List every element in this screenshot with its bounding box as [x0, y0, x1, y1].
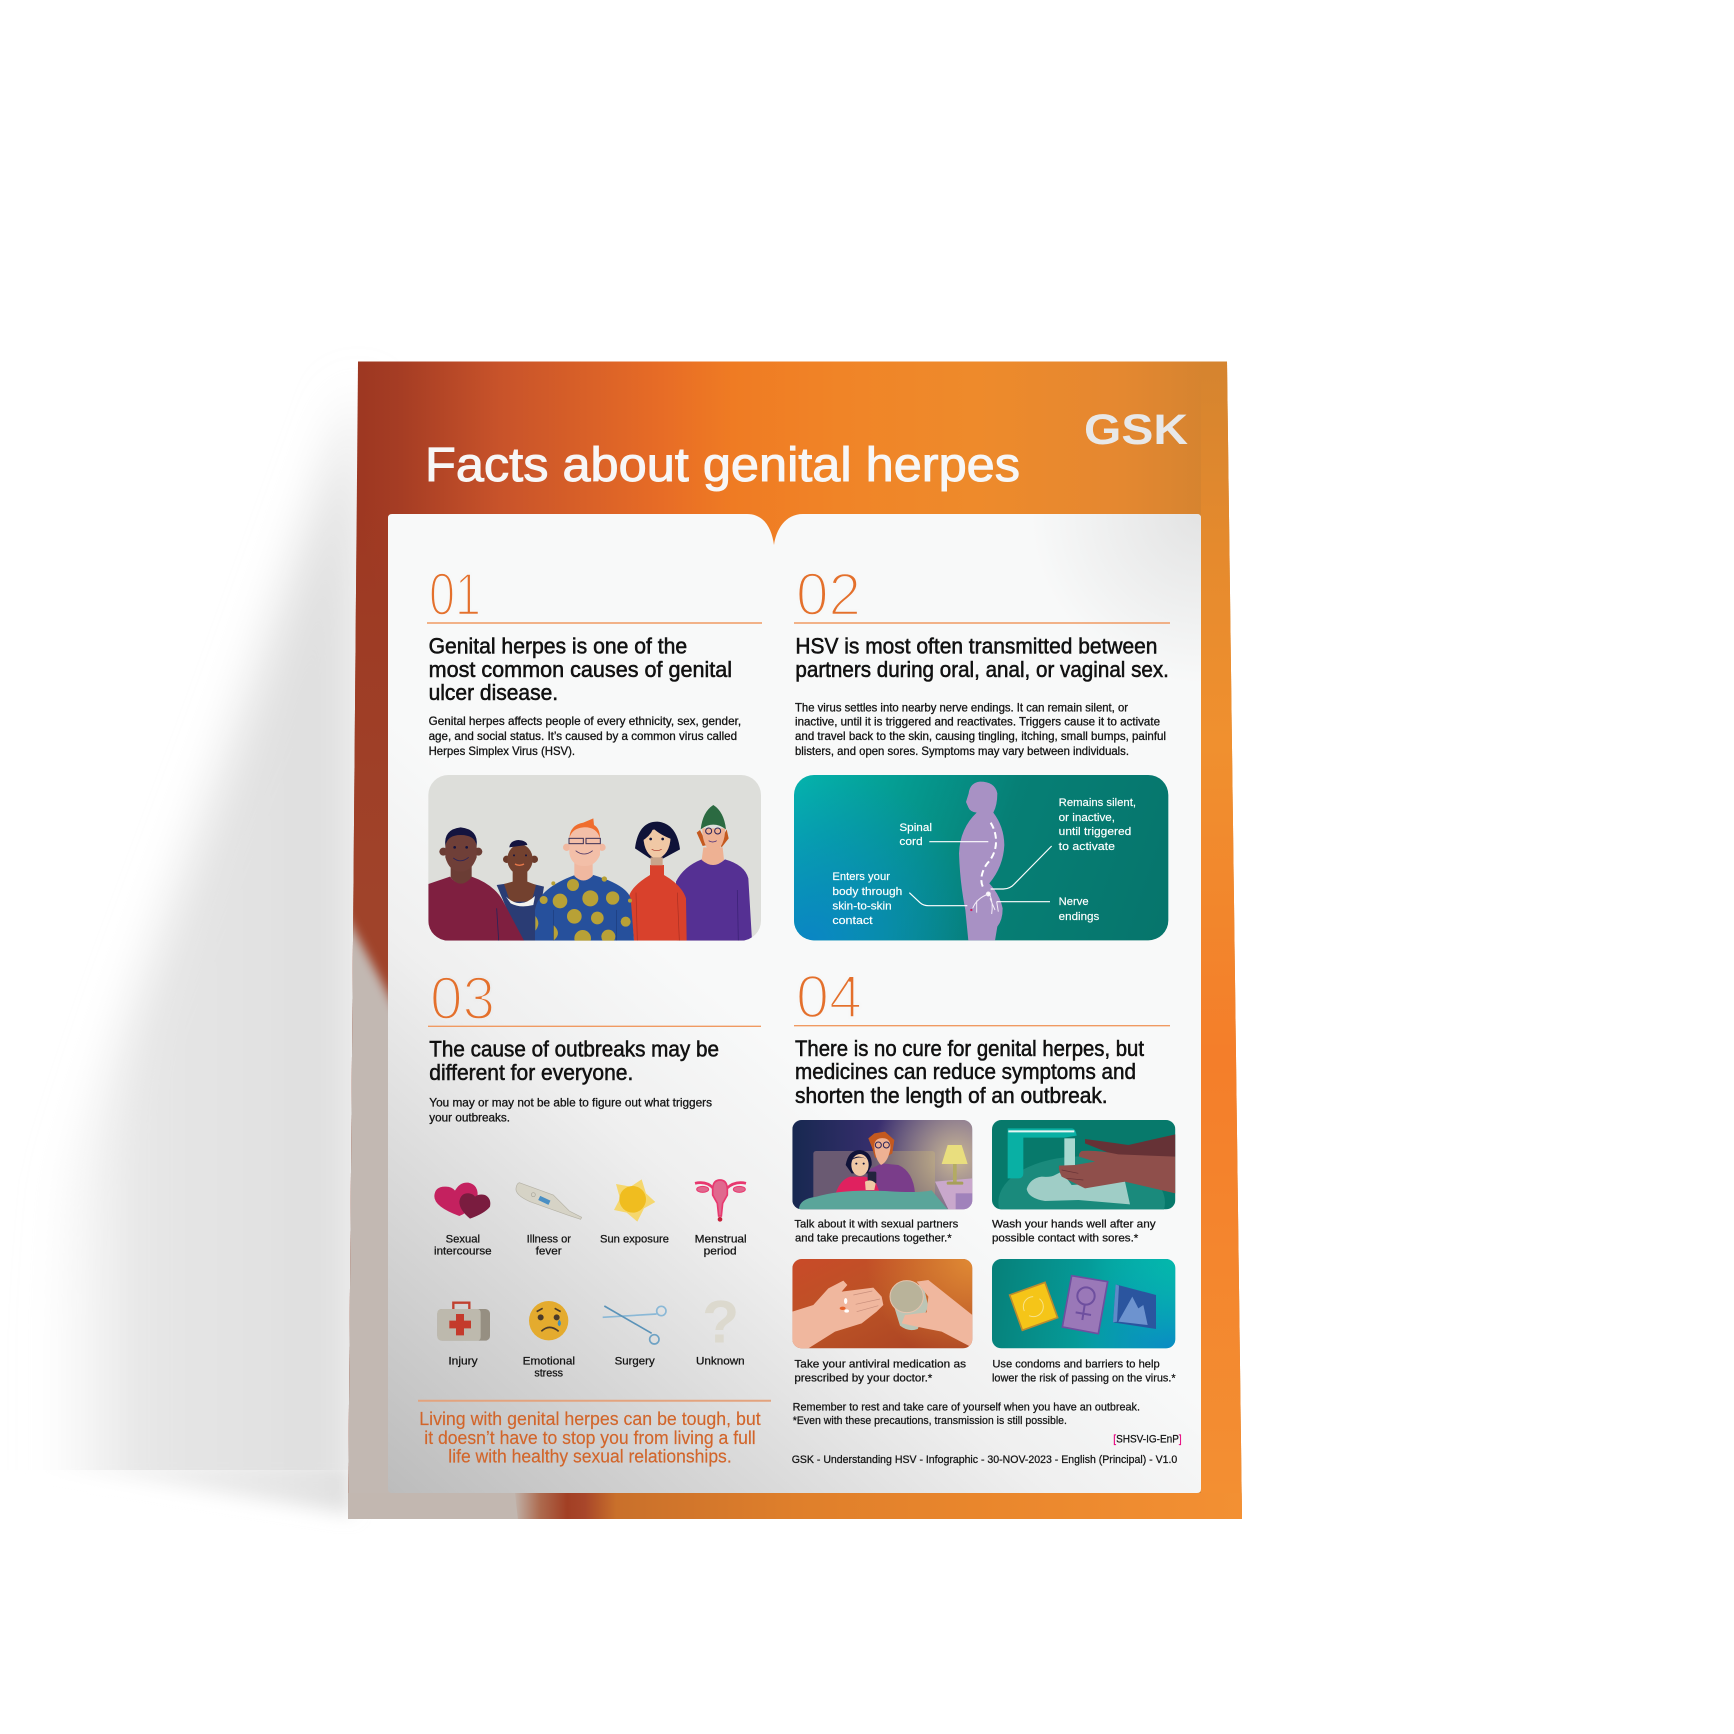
logo: GSK: GSK — [1084, 406, 1188, 454]
number 04: 04 — [796, 964, 862, 1030]
number 03: 03 — [430, 965, 495, 1032]
label: remains silent: Remains silent, — [1059, 797, 1136, 809]
heading 01: most common causes of genital — [429, 657, 732, 682]
label: nerve endings: endings — [1059, 911, 1100, 923]
heading 02: HSV is most often transmitted between — [795, 634, 1157, 658]
person 5: purple sweater, green beanie — [676, 805, 752, 941]
body text 02: The virus settles into nearby nerve endings. It can remain silent, or — [795, 702, 1128, 714]
caption: talk — [794, 1219, 959, 1245]
label: spinal cord: Spinal — [899, 822, 932, 834]
person 3: blue polka dot sweater — [535, 818, 634, 947]
label: enters your body: body through — [832, 886, 902, 898]
heading 04: shorten the length of an outbreak. — [795, 1083, 1108, 1108]
document footer line: GSK - Understanding HSV - Infographic - 30-NOV-2023 - English (Principal) - V1.0 — [792, 1454, 1177, 1466]
heading 01 — [429, 634, 732, 705]
section 04 — [792, 964, 1176, 1385]
trigger: surgery: Surgery — [615, 1356, 655, 1368]
poster sheet — [338, 362, 1246, 1530]
document reference code: [SHSV-IG-EnP] — [1113, 1433, 1182, 1445]
caption: wash: Wash your hands well after any — [992, 1219, 1156, 1231]
heading 03: different for everyone. — [429, 1060, 633, 1085]
illustration: group of five people — [428, 775, 761, 947]
caption: wash: possible contact with sores.* — [992, 1233, 1139, 1245]
body text 01: Herpes Simplex Virus (HSV). — [429, 745, 575, 758]
trigger: sun exposure — [600, 1179, 669, 1246]
tip: wash hands — [992, 1120, 1176, 1210]
wall shadow — [80, 428, 357, 1470]
body text 03: your outbreaks. — [429, 1112, 510, 1125]
closing message: it doesn’t have to stop you from living a full — [424, 1427, 756, 1448]
body text 01: Genital herpes affects people of every ethnicity, sex, gender, — [429, 715, 741, 728]
body text 02 — [795, 702, 1166, 758]
heading 04: medicines can reduce symptoms and — [795, 1059, 1136, 1084]
caption: wash — [992, 1219, 1156, 1245]
label: remains silent: until triggered — [1059, 826, 1131, 838]
label: nerve endings: Nerve — [1059, 896, 1089, 908]
number 02: 02 — [796, 561, 861, 628]
person 2: navy top — [497, 840, 544, 941]
caption: talk: and take precautions together.* — [795, 1233, 952, 1245]
caption: talk: Talk about it with sexual partners — [794, 1219, 959, 1231]
body text 02: and travel back to the skin, causing tingling, itching, small bumps, painful — [795, 730, 1166, 743]
label: enters your body: contact — [832, 915, 874, 927]
number 01: 01 — [429, 561, 481, 628]
trigger: unknown — [696, 1288, 745, 1368]
heading 03: The cause of outbreaks may be — [429, 1037, 719, 1062]
caption: condoms — [992, 1359, 1176, 1385]
trigger: injury — [437, 1303, 490, 1368]
footnotes: Remember to rest and take care of yourself when you have an outbreak. — [793, 1402, 1140, 1414]
trigger: injury: Injury — [448, 1356, 478, 1368]
trigger: illness or fever: fever — [536, 1246, 562, 1258]
caption: medication — [794, 1359, 966, 1385]
label: spinal cord: cord — [899, 836, 923, 848]
heading 04: There is no cure for genital herpes, but — [795, 1036, 1145, 1061]
section 01 — [427, 561, 762, 947]
trigger: emotional stress: Emotional — [523, 1356, 575, 1368]
closing message: life with healthy sexual relationships. — [448, 1446, 732, 1467]
trigger: unknown: Unknown — [696, 1356, 745, 1368]
trigger icon grid — [434, 1179, 747, 1380]
body text 02: blisters, and open sores. Symptoms may vary between individuals. — [795, 745, 1129, 758]
footnotes: *Even with these precautions, transmission is still possible. — [793, 1415, 1067, 1427]
trigger: menstrual period: Menstrual — [695, 1234, 747, 1246]
tip: condoms and barriers — [992, 1259, 1175, 1348]
body text 03: You may or may not be able to figure out what triggers — [429, 1097, 712, 1110]
spinal cord dashed line — [981, 823, 996, 889]
trigger: illness or fever — [516, 1183, 582, 1258]
person 1: burgundy sweater — [428, 827, 524, 941]
trigger: menstrual period: period — [704, 1246, 737, 1258]
trigger: emotional stress: stress — [534, 1368, 563, 1380]
trigger: sexual intercourse: intercourse — [434, 1246, 492, 1258]
trigger: sun exposure: Sun exposure — [600, 1234, 669, 1246]
body text 03 — [429, 1097, 712, 1125]
heading 02 — [795, 634, 1169, 682]
trigger: surgery — [603, 1306, 666, 1368]
diagram: HSV path through the body — [794, 775, 1168, 941]
white content panel with notch — [388, 514, 1201, 1493]
label: spinal cord — [899, 822, 932, 848]
label: enters your body: Enters your — [832, 871, 890, 883]
trigger: illness or fever: Illness or — [527, 1234, 571, 1246]
trigger: menstrual period — [695, 1180, 747, 1258]
section 03 — [428, 965, 761, 1380]
trigger: sexual intercourse: Sexual — [446, 1234, 480, 1246]
heading 04 — [795, 1036, 1145, 1108]
label: enters your body — [832, 871, 902, 927]
label: remains silent: or inactive, — [1059, 812, 1115, 824]
body silhouette — [959, 782, 1004, 941]
heading 02: partners during oral, anal, or vaginal sex. — [795, 657, 1169, 682]
closing message — [418, 1401, 771, 1467]
trigger: sexual intercourse — [434, 1183, 492, 1258]
label: remains silent: to activate — [1059, 841, 1115, 853]
caption: condoms: lower the risk of passing on the virus.* — [992, 1373, 1176, 1385]
heading 01: ulcer disease. — [429, 680, 558, 705]
label: nerve endings — [1059, 896, 1100, 923]
heading 01: Genital herpes is one of the — [429, 634, 687, 658]
closing message: Living with genital herpes can be tough, but — [419, 1408, 761, 1429]
caption: medication: prescribed by your doctor.* — [794, 1373, 933, 1385]
label: enters your body: skin-to-skin — [832, 900, 892, 912]
body text 02: inactive, until it is triggered and reactivates. Triggers cause it to activate — [795, 716, 1160, 728]
nerve endings — [973, 892, 998, 914]
tips grid — [792, 1120, 1176, 1385]
section 02 — [794, 561, 1170, 941]
person 4: red turtleneck — [629, 822, 687, 941]
body text 01 — [429, 715, 741, 758]
tip: talk to partners — [792, 1120, 972, 1209]
label: remains silent — [1059, 797, 1136, 853]
body text 01: age, and social status. It’s caused by a common virus called — [429, 730, 737, 743]
footnotes — [793, 1402, 1140, 1427]
tip: take antiviral medication — [792, 1259, 972, 1348]
title: Facts about genital herpes — [425, 439, 1020, 492]
floor shadow — [130, 1470, 348, 1516]
caption: condoms: Use condoms and barriers to help — [992, 1359, 1160, 1371]
leader lines — [909, 842, 1052, 906]
caption: medication: Take your antiviral medication as — [794, 1359, 966, 1371]
heading 03 — [429, 1037, 719, 1085]
trigger: unknown: ? — [702, 1288, 739, 1356]
trigger: emotional stress — [523, 1301, 575, 1380]
